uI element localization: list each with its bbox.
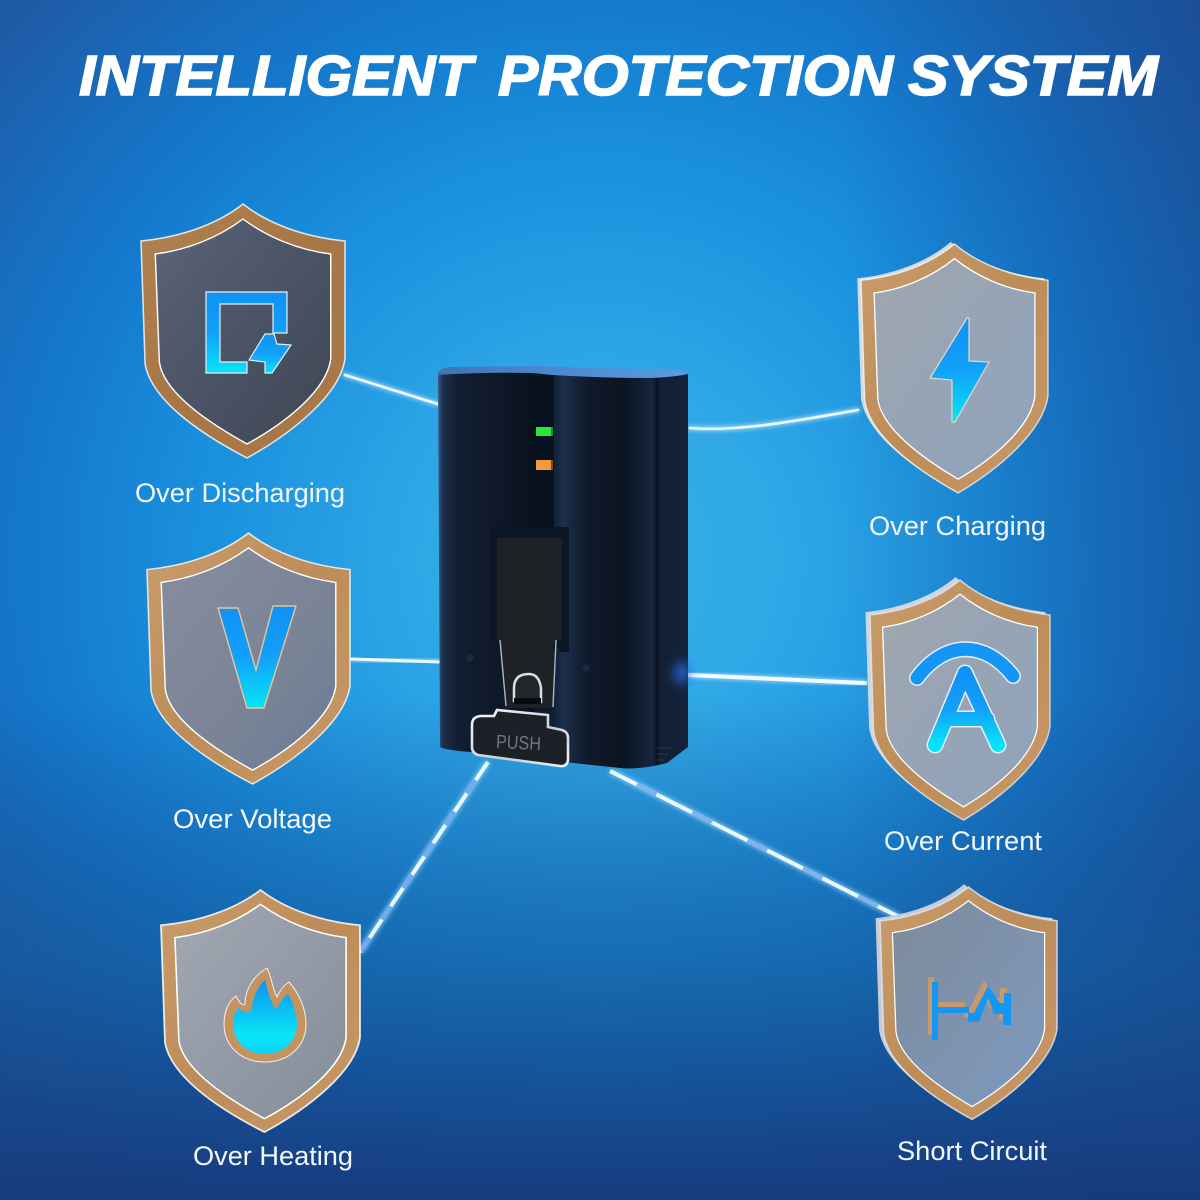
label: over voltage: Over Voltage xyxy=(173,804,332,834)
battery xyxy=(438,366,689,768)
title: PROTECTION xyxy=(498,44,895,108)
shield: over heating xyxy=(161,890,360,1132)
LED green xyxy=(536,427,553,436)
connector: over heating xyxy=(360,762,488,952)
push tab: PUSH xyxy=(495,732,541,755)
LED channel xyxy=(532,375,554,527)
shield: over charging xyxy=(857,242,1048,493)
shield: over voltage xyxy=(147,533,350,784)
label: over discharging: Over Discharging xyxy=(135,478,345,508)
icon: lightning bolt xyxy=(930,318,989,422)
title xyxy=(79,44,1160,108)
connector: over voltage xyxy=(352,659,440,662)
connector: over current xyxy=(688,675,865,683)
labels xyxy=(135,478,1047,1171)
battery body xyxy=(438,373,688,768)
shield: short circuit xyxy=(876,884,1057,1119)
LED orange xyxy=(536,460,553,470)
shield: over current xyxy=(866,577,1050,820)
icon: battery discharge xyxy=(206,292,291,373)
connector: over charging xyxy=(690,410,858,429)
icon: circuit switch xyxy=(928,977,1011,1040)
latch tape xyxy=(497,538,562,708)
label: over heating: Over Heating xyxy=(193,1141,353,1171)
battery vents xyxy=(657,748,672,760)
icon: letter A with arc xyxy=(917,649,1013,745)
label: over current: Over Current xyxy=(884,826,1042,856)
blue reflection xyxy=(675,663,689,683)
label: over charging: Over Charging xyxy=(869,511,1046,541)
latch recess xyxy=(490,527,569,700)
battery top face xyxy=(438,366,688,382)
push tab xyxy=(472,710,568,766)
label: short circuit: Short Circuit xyxy=(897,1136,1047,1166)
connector: short circuit xyxy=(610,771,905,920)
icon: flame xyxy=(224,968,306,1062)
connector: over discharging xyxy=(345,375,438,404)
clip xyxy=(514,674,541,704)
title: SYSTEM xyxy=(908,44,1160,108)
icon: letter V xyxy=(218,606,296,708)
title: INTELLIGENT xyxy=(79,44,476,108)
latch arm outline xyxy=(500,640,556,707)
shield: over discharging xyxy=(141,204,345,458)
screw holes xyxy=(466,654,590,672)
